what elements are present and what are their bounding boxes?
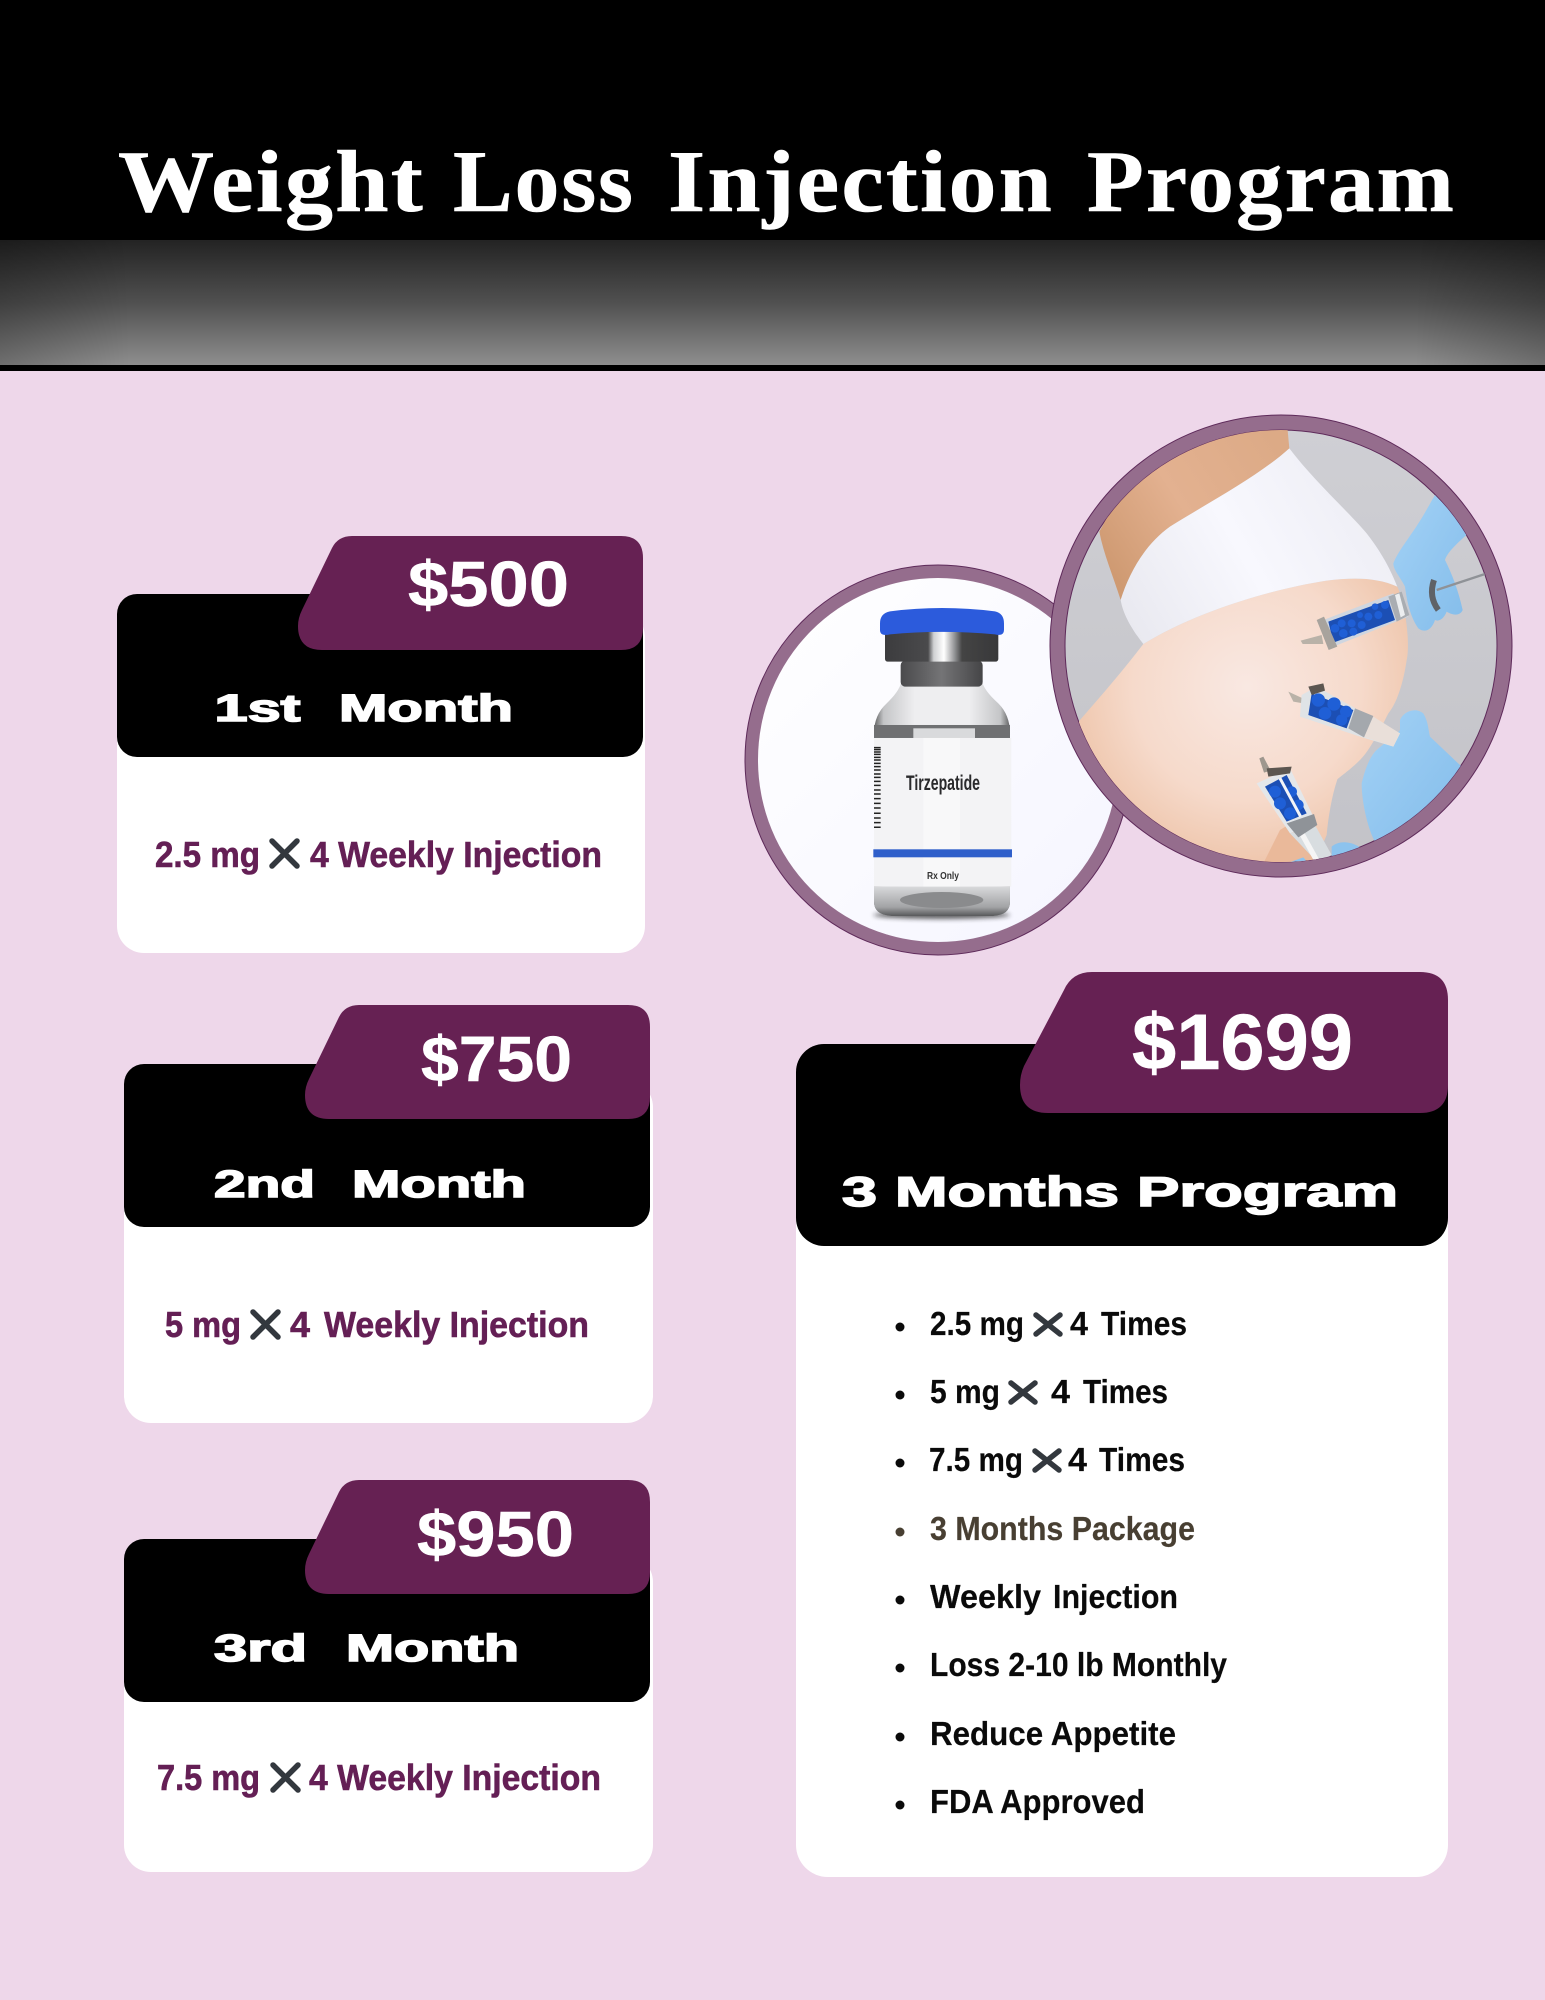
item: 7.5 mg x 4 times: Times (1099, 1441, 1185, 1478)
white underwear band (1121, 448, 1397, 644)
vial label: Rx Only: Rx Only (927, 871, 959, 882)
card body (117, 610, 645, 953)
card: 3 months program (796, 972, 1448, 1877)
syringe 2 (1288, 692, 1302, 703)
item: 2.5 mg x 4 times (896, 1305, 1187, 1342)
item: 5 mg x 4 times (896, 1373, 1168, 1410)
list: program details (896, 1305, 1228, 1820)
card: 1st month (117, 536, 645, 953)
price: $1699 (1132, 997, 1353, 1086)
item: 5 mg x 4 times: 5 mg (930, 1373, 1000, 1410)
dosage (165, 1304, 589, 1345)
header band (0, 0, 1545, 371)
heading: Month (339, 688, 513, 730)
photo: Tirzepatide vial in circle (745, 565, 1131, 955)
title: Injection (668, 134, 1054, 231)
item: 3 months package: 3 Months Package (930, 1510, 1195, 1547)
title: Loss (453, 134, 635, 231)
thigh skin (1060, 579, 1408, 867)
card: 2nd month (124, 1005, 653, 1423)
heading (214, 1628, 519, 1670)
syringe 1 (1437, 574, 1485, 590)
heading: 1st (214, 688, 301, 730)
dosage: 4 Weekly Injection (309, 1757, 601, 1798)
vial label: Tirzepatide: Tirzepatide (906, 772, 980, 795)
item: FDA approved: FDA Approved (930, 1783, 1145, 1820)
syringe 3 (1259, 757, 1271, 773)
heading: Months (895, 1168, 1119, 1215)
title (118, 134, 1456, 231)
price tab (305, 1005, 650, 1119)
dosage: 4 (290, 1304, 310, 1345)
item: 7.5 mg x 4 times: 4 (1068, 1441, 1088, 1478)
heading: Program (1137, 1168, 1398, 1215)
heading: 3rd (214, 1628, 307, 1670)
item: 5 mg x 4 times: 4 (1051, 1373, 1071, 1410)
price: $750 (421, 1023, 572, 1095)
dosage: Weekly Injection (324, 1304, 589, 1345)
item: 5 mg x 4 times: Times (1083, 1373, 1168, 1410)
card body (124, 1080, 653, 1423)
price tab (305, 1480, 650, 1594)
heading: 2nd (214, 1164, 315, 1206)
title: Program (1087, 134, 1456, 231)
item: 7.5 mg x 4 times (896, 1441, 1185, 1478)
item: 2.5 mg x 4 times: Times (1101, 1305, 1187, 1342)
dosage: 7.5 mg (157, 1757, 260, 1798)
dosage: 5 mg (165, 1304, 241, 1345)
header bar (124, 1064, 650, 1227)
dosage (157, 1757, 601, 1798)
photo: injections in hip circle (1050, 415, 1512, 877)
heading: 3 (842, 1168, 877, 1215)
item: 2.5 mg x 4 times: 4 (1070, 1305, 1089, 1342)
dosage (155, 834, 602, 875)
card body (124, 1555, 653, 1872)
header bar (124, 1539, 650, 1702)
price: $500 (408, 548, 569, 620)
gloves (1393, 495, 1468, 631)
item: weekly injection (896, 1578, 1178, 1615)
heading: Month (352, 1164, 526, 1206)
price tab (1020, 972, 1448, 1113)
item: 2.5 mg x 4 times: 2.5 mg (930, 1305, 1024, 1342)
dosage: 2.5 mg (155, 834, 260, 875)
heading (842, 1168, 1398, 1215)
title: Weight (118, 134, 425, 231)
card body (796, 1060, 1448, 1877)
item: 7.5 mg x 4 times: 7.5 mg (929, 1441, 1023, 1478)
item: loss 2-10 lb monthly: Loss 2-10 lb Monthly (930, 1646, 1228, 1683)
waist skin (1099, 420, 1289, 600)
price: $950 (417, 1498, 574, 1570)
card: 3rd month (124, 1480, 653, 1872)
header bar (117, 594, 643, 757)
item: weekly injection: Weekly (930, 1578, 1042, 1615)
price tab (298, 536, 643, 650)
heading (214, 1164, 526, 1206)
dosage: 4 Weekly Injection (310, 834, 602, 875)
heading: Month (346, 1628, 519, 1670)
item: weekly injection: Injection (1053, 1578, 1178, 1615)
header bar (796, 1044, 1448, 1246)
heading (214, 688, 513, 730)
item: reduce appetite: Reduce Appetite (930, 1715, 1176, 1752)
